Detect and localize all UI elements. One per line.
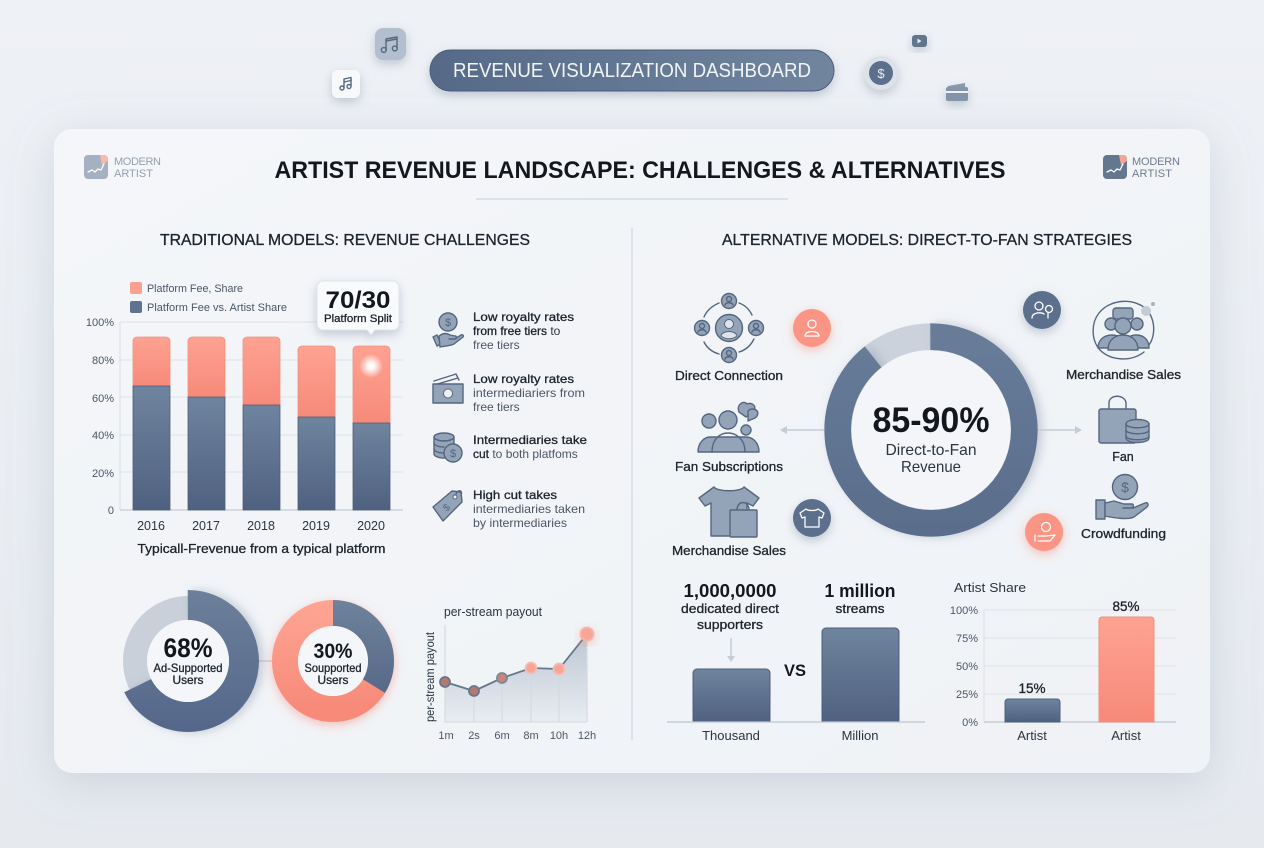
callout: 70/30 platform split: 70/30	[326, 287, 390, 314]
item: fan, shopping bag with coins: Fan	[1112, 450, 1134, 464]
bar 2016	[133, 337, 170, 510]
axis labels: Million	[842, 728, 878, 743]
donut: 30% supported users: Users	[318, 673, 348, 687]
x axis years: 2019	[302, 519, 330, 533]
logo left: ARTIST	[114, 168, 153, 180]
item: crowdfunding, hand with coin	[1081, 474, 1166, 541]
item: merchandise sales, community	[1066, 301, 1181, 382]
item: fan, shopping bag with coins	[1099, 396, 1149, 464]
y axis labels	[86, 317, 114, 517]
item: high cut, price tag: intermediaries taken	[473, 502, 585, 516]
callout: 70/30 platform split: Platform Split	[324, 313, 392, 325]
bar million	[822, 628, 899, 722]
stat: one million streams	[824, 581, 896, 616]
bar artist 85%: 85%	[1112, 599, 1140, 614]
bar artist 15%	[1005, 681, 1060, 722]
icon: credit card	[946, 83, 968, 101]
stat: one million streams: 1 million	[824, 581, 896, 601]
bar artist 85%	[1099, 599, 1154, 722]
bar 2018	[243, 337, 280, 510]
item: low royalty rates, cash	[433, 372, 585, 414]
chart legend: Platform Fee, Share	[147, 283, 243, 295]
heading: traditional models: TRADITIONAL MODELS: REVENUE CHALLENGES	[160, 232, 530, 249]
item: high cut, price tag: $	[441, 502, 453, 514]
logo right: MODERN	[1132, 156, 1180, 168]
x axis years: 2020	[357, 519, 385, 533]
item: low royalty rates, hand with coin: Low royalty rates	[473, 310, 574, 324]
x axis years: 2017	[192, 519, 220, 533]
center donut: 85-90% direct-to-fan: Revenue	[901, 459, 961, 476]
icon: dollar coin	[864, 56, 898, 90]
arrow left	[780, 426, 824, 434]
item: crowdfunding, hand with coin: Crowdfunding	[1081, 527, 1166, 541]
center donut: 85-90% direct-to-fan: 85-90%	[872, 401, 990, 440]
donut: 30% supported users	[285, 613, 381, 709]
bar chart: artist share: 50%	[956, 661, 978, 673]
line chart: per-stream payout: 2s	[468, 730, 480, 742]
badge: dark t-shirt	[793, 499, 831, 537]
donut: 30% supported users: 30%	[314, 640, 353, 663]
center donut: 85-90% direct-to-fan: Direct-to-Fan	[886, 442, 976, 459]
item: intermediaries, coins stack	[434, 433, 587, 462]
title pill	[430, 50, 834, 91]
item: crowdfunding, hand with coin: $	[1121, 479, 1129, 495]
logo right	[1103, 155, 1180, 180]
center donut: 85-90% direct-to-fan	[838, 337, 1024, 523]
item: low royalty rates, cash: free tiers	[473, 400, 520, 414]
item: low royalty rates, hand with coin: $	[445, 317, 451, 329]
bar chart: artist share: 25%	[956, 689, 978, 701]
item: low royalty rates, hand with coin: free tiers	[473, 338, 520, 352]
stat: dedicated supporters	[681, 581, 779, 632]
chart legend: Platform Fee vs. Artist Share	[147, 302, 287, 314]
title pill: REVENUE VISUALIZATION DASHBOARD	[453, 59, 811, 82]
line chart: per-stream payout	[423, 605, 596, 742]
item: high cut, price tag	[433, 488, 585, 530]
line chart: per-stream payout: per-stream payout	[423, 631, 437, 722]
item: direct connection	[675, 294, 783, 383]
item: merchandise sales, shirt and bag: Merchandise Sales	[672, 544, 786, 558]
arrow right	[1038, 426, 1082, 434]
bar 2020	[353, 346, 390, 510]
bar 2017	[188, 337, 225, 510]
line chart: per-stream payout: 6m	[494, 730, 510, 742]
callout: 70/30 platform split	[317, 281, 399, 335]
x axis years: 2018	[247, 519, 275, 533]
axis labels	[702, 728, 878, 743]
donut: 68% ad-supported users: 68%	[164, 633, 212, 663]
bar chart: artist share: Artist Share	[954, 580, 1026, 595]
stat: dedicated supporters: 1,000,0000	[684, 581, 776, 601]
item: low royalty rates, hand with coin	[433, 310, 574, 352]
line chart: per-stream payout: 1m	[438, 730, 454, 742]
stat: dedicated supporters: supporters	[697, 617, 764, 632]
axis labels: Thousand	[702, 728, 760, 743]
badge: dark profile	[1023, 291, 1061, 329]
item: low royalty rates, hand with coin: from free tiers to	[473, 324, 561, 338]
artist axis labels: Artist	[1111, 728, 1141, 743]
item: intermediaries, coins stack: cut to both platfoms	[473, 447, 578, 461]
stat: dedicated supporters: dedicated direct	[681, 601, 779, 616]
logo right: ARTIST	[1132, 168, 1172, 180]
y axis labels: 20%	[92, 468, 114, 480]
item: intermediaries, coins stack: Intermediaries take	[473, 433, 587, 447]
item: low royalty rates, cash: Low royalty rates	[473, 372, 574, 386]
donut: 68% ad-supported users	[132, 605, 244, 717]
x axis years	[137, 519, 385, 533]
icon: dollar coin: $	[877, 66, 885, 81]
stat: one million streams: streams	[836, 601, 885, 616]
donut: 68% ad-supported users: Ad-Supported	[154, 661, 222, 675]
artist axis labels: Artist	[1017, 728, 1047, 743]
bar thousand	[693, 669, 770, 722]
line chart: per-stream payout: per-stream payout	[444, 605, 543, 619]
line chart: per-stream payout: 10h	[550, 730, 568, 742]
main title: ARTIST REVENUE LANDSCAPE: CHALLENGES & ALTERNATIVES	[274, 157, 1006, 184]
comparison chart: thousand vs million	[667, 581, 925, 743]
icon: video play	[912, 35, 927, 47]
artist axis labels	[1017, 728, 1141, 743]
bar chart: artist share: 100%	[950, 605, 978, 617]
bar chart: artist share: 75%	[956, 633, 978, 645]
bar 2019	[298, 346, 335, 510]
line chart: per-stream payout: 8m	[523, 730, 539, 742]
item: high cut, price tag: by intermediaries	[473, 516, 567, 530]
bar chart: artist share	[950, 580, 1176, 743]
y axis labels: 80%	[92, 355, 114, 367]
y axis labels: 60%	[92, 393, 114, 405]
item: direct connection: Direct Connection	[675, 369, 783, 383]
chart legend	[130, 282, 287, 314]
main card	[54, 129, 1210, 773]
y axis labels: 100%	[86, 317, 114, 329]
y axis labels: 0	[108, 505, 114, 517]
logo left: MODERN	[114, 156, 161, 168]
x axis years: 2016	[137, 519, 165, 533]
vs label: VS	[784, 662, 806, 680]
item: high cut, price tag: High cut takes	[473, 488, 557, 502]
item: intermediaries, coins stack: $	[450, 448, 456, 460]
badge: coral person	[793, 309, 831, 347]
icon: music note tile light	[332, 70, 360, 98]
item: merchandise sales, community: Merchandise Sales	[1066, 368, 1181, 382]
line chart: per-stream payout: 12h	[578, 730, 596, 742]
logo left	[84, 155, 161, 180]
bar artist 15%: 15%	[1018, 681, 1046, 696]
connector between donuts	[258, 660, 273, 662]
heading: alternative models: ALTERNATIVE MODELS: DIRECT-TO-FAN STRATEGIES	[722, 232, 1132, 249]
item: low royalty rates, cash: intermediariers from	[473, 386, 585, 400]
badge: coral hand coin	[1025, 513, 1063, 551]
item: merchandise sales, shirt and bag	[672, 487, 786, 558]
donut: 30% supported users: Soupported	[304, 661, 362, 675]
item: fan subscriptions: Fan Subscriptions	[675, 460, 783, 474]
challenges list	[433, 310, 587, 530]
donut: 68% ad-supported users: Users	[172, 673, 204, 687]
bar chart: artist share: 0%	[962, 717, 978, 729]
y axis labels: 40%	[92, 430, 114, 442]
stacked bar chart	[86, 281, 403, 556]
chart caption: Typicall-Frevenue from a typical platform	[138, 541, 386, 556]
arrow down	[727, 638, 735, 662]
icon: music note tile dark	[375, 28, 406, 60]
item: fan subscriptions	[675, 402, 783, 474]
